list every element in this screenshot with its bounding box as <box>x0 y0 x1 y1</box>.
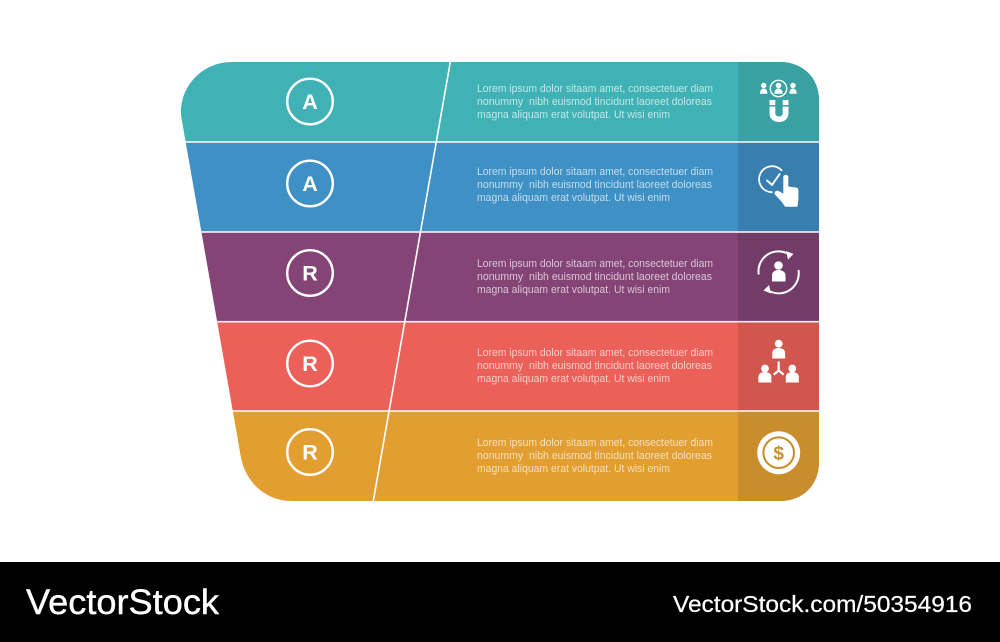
text block: row 3: nonummy nibh euismod tincidunt laoreet doloreas <box>477 271 712 283</box>
badge: R row 3 <box>287 250 333 296</box>
text block: row 3 <box>477 258 713 296</box>
badge: A row 2 <box>287 161 333 206</box>
panel: dark icon column <box>738 60 820 503</box>
text block: row 3: Lorem ipsum dolor sitaam amet, consectetuer diam <box>477 258 713 270</box>
icon: check mark and pointing hand <box>759 166 798 207</box>
text block: row 2: Lorem ipsum dolor sitaam amet, consectetuer diam <box>477 166 713 178</box>
badge: A row 1 <box>287 79 333 124</box>
icon: person in refresh cycle <box>758 251 799 294</box>
icon: magnet attracting people <box>760 80 797 122</box>
footer image id text: VectorStock.com/50354916 <box>673 591 972 617</box>
badge: R row 4 <box>287 341 333 386</box>
text block: row 5: magna aliquam erat volutpat. Ut wisi enim <box>477 463 670 475</box>
icon: team hierarchy <box>758 340 799 382</box>
panel: row 4 band <box>217 322 738 411</box>
icon: dollar coin: $ <box>773 444 784 464</box>
badge: R row 4: R <box>302 352 318 376</box>
text block: row 4: magna aliquam erat volutpat. Ut wisi enim <box>477 373 670 385</box>
text block: row 4: nonummy nibh euismod tincidunt laoreet doloreas <box>477 360 712 372</box>
text block: row 1: nonummy nibh euismod tincidunt laoreet doloreas <box>477 96 712 108</box>
badge: R row 5 <box>287 429 333 475</box>
badge: R row 3: R <box>302 262 318 286</box>
text block: row 2: nonummy nibh euismod tincidunt laoreet doloreas <box>477 179 712 191</box>
text block: row 5: Lorem ipsum dolor sitaam amet, consectetuer diam <box>477 437 713 449</box>
text block: row 5: nonummy nibh euismod tincidunt laoreet doloreas <box>477 450 712 462</box>
text block: row 5 <box>477 437 713 475</box>
text block: row 1 <box>477 83 713 121</box>
text block: row 2: magna aliquam erat volutpat. Ut wisi enim <box>477 192 670 204</box>
text block: row 4 <box>477 347 713 385</box>
panel: row 2 band <box>186 142 738 232</box>
panel: row 1 band <box>170 60 830 142</box>
panel: row 5 band <box>232 411 819 501</box>
panel: row 3 band <box>202 232 738 322</box>
badge: R row 5: R <box>302 441 318 465</box>
text block: row 3: magna aliquam erat volutpat. Ut wisi enim <box>477 284 670 296</box>
badge: A row 1: A <box>302 90 318 114</box>
text block: row 4: Lorem ipsum dolor sitaam amet, consectetuer diam <box>477 347 713 359</box>
icon: dollar coin <box>757 431 800 474</box>
funnel chart <box>170 60 830 503</box>
badge: A row 2: A <box>302 172 318 196</box>
text block: row 1: Lorem ipsum dolor sitaam amet, consectetuer diam <box>477 83 713 95</box>
footer logo text: VectorStock <box>26 583 220 622</box>
footer bar <box>0 562 1000 642</box>
text block: row 1: magna aliquam erat volutpat. Ut wisi enim <box>477 109 670 121</box>
text block: row 2 <box>477 166 713 204</box>
